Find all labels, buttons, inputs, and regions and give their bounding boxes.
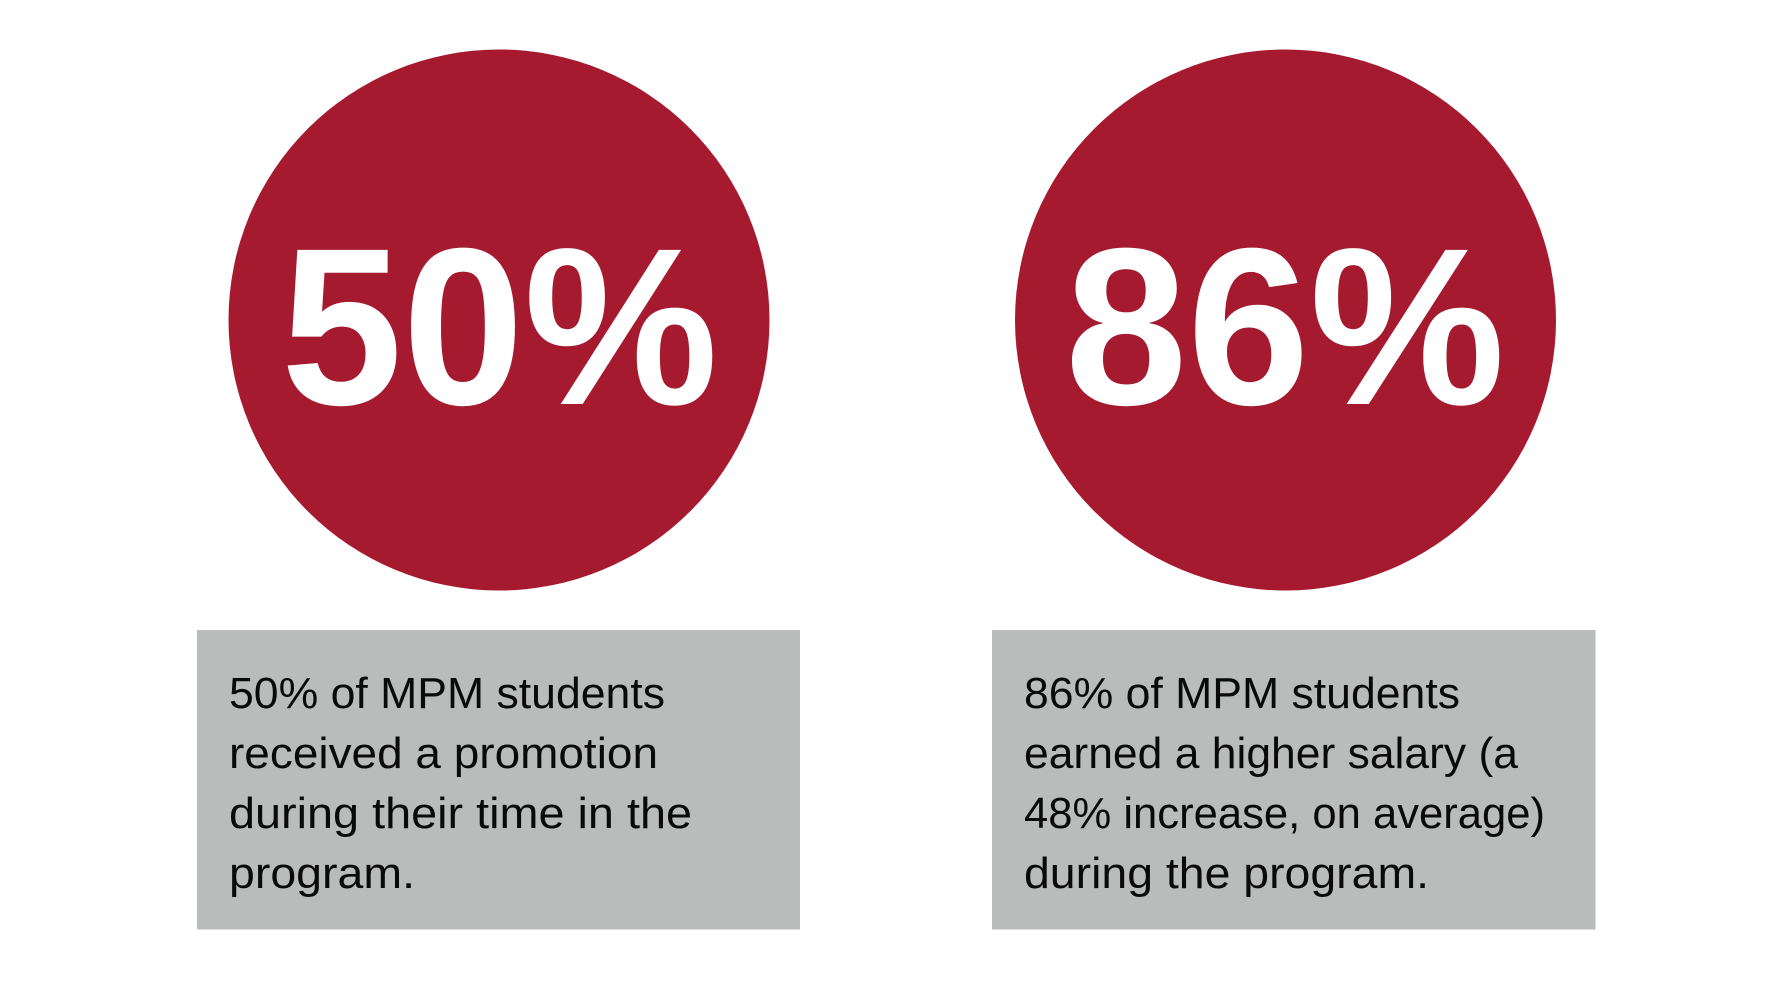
circle badge: 50% <box>228 50 770 590</box>
panel: 86% statistic <box>992 50 1596 930</box>
text box: 50% description: during their time in the <box>229 789 692 838</box>
text box: 50% description: 50% of MPM students <box>229 669 665 718</box>
text box: 86% description: earned a higher salary (a <box>1024 729 1519 778</box>
circle badge: 86%: 86% <box>1065 202 1505 452</box>
text box: 50% description: program. <box>229 849 415 898</box>
circle badge: 86% <box>1015 50 1556 590</box>
text box: 50% description <box>197 630 800 930</box>
text box: 86% description: 86% of MPM students <box>1024 669 1460 718</box>
text box: 86% description: 48% increase, on average) <box>1024 789 1545 838</box>
text box: 50% description: received a promotion <box>229 729 658 778</box>
circle badge: 50%: 50% <box>281 202 718 452</box>
text box: 86% description: during the program. <box>1024 849 1429 898</box>
panel: 50% statistic <box>197 50 800 930</box>
text box: 86% description <box>992 630 1596 930</box>
